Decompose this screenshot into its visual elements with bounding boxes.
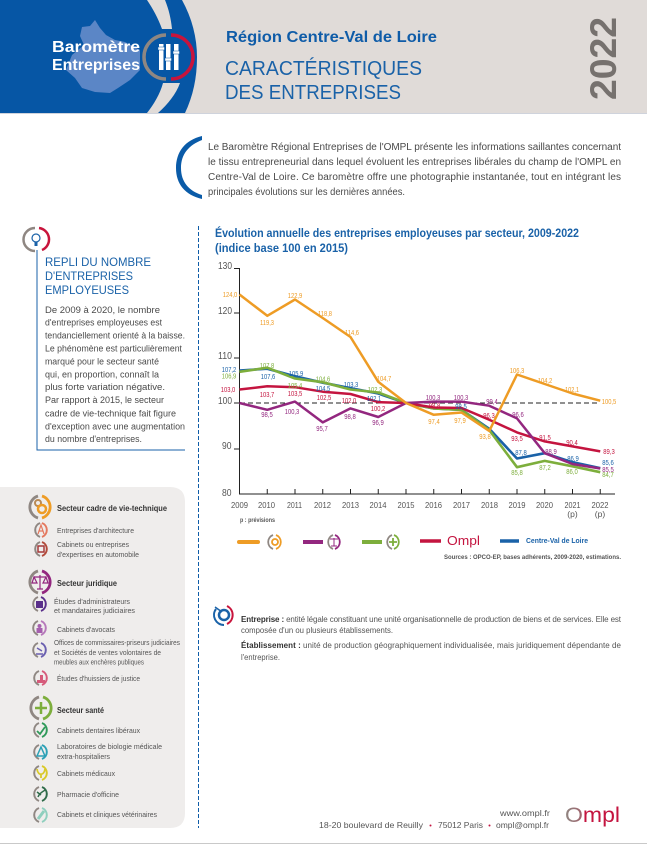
data labels: OMPL <box>221 387 615 456</box>
intro text: Le Baromètre Régional Entreprises de l'OMPL présente les informations saillantes concernant <box>208 142 621 153</box>
data labels: Centre-Val de Loire: 107,6 <box>261 374 275 381</box>
data labels: juridique: 99,4 <box>486 399 498 406</box>
heading: D'ENTREPRISES <box>45 269 133 283</box>
intro text: Centre-Val de Loire. Ce baromètre offre une photographie instantanée, tout en intégrant les <box>208 172 621 183</box>
panel: sectors <box>0 487 185 828</box>
legend <box>239 534 588 549</box>
data labels: OMPL: 90,4 <box>566 440 578 447</box>
icon: laboratoires <box>34 745 47 759</box>
x axis labels <box>231 500 609 519</box>
body text: du nombre d'entreprises. <box>45 434 142 445</box>
y axis labels: 130 <box>218 261 232 272</box>
body text: De 2009 à 2020, le nombre <box>45 305 160 316</box>
footer rule <box>0 843 647 844</box>
label: d'expertises en automobile <box>57 550 139 559</box>
data labels: Centre-Val de Loire: 104,5 <box>316 386 330 393</box>
body text: d'exception avec une augmentation <box>45 422 185 432</box>
data labels: OMPL: 98,8 <box>429 403 440 410</box>
label: Offices de commissaires-priseurs judiciaires <box>54 638 180 647</box>
year: 2022 <box>583 17 624 100</box>
label: et mandataires judiciaires <box>54 606 135 615</box>
label: meubles aux enchères publiques <box>54 658 144 666</box>
legend: juridique <box>303 535 340 549</box>
data labels: santé: 102,3 <box>368 387 382 394</box>
data labels: juridique: 85,5 <box>602 467 614 474</box>
body text: marqué pour le secteur santé <box>45 356 159 368</box>
icon: architecture <box>35 523 47 537</box>
label <box>54 597 135 615</box>
y axis labels: 90 <box>222 441 232 452</box>
data labels: cadre de vie: 119,3 <box>260 320 274 327</box>
data labels: juridique: 100,3 <box>285 409 299 416</box>
heading: EMPLOYEUSES <box>45 283 129 297</box>
page title: CARACTÉRISTIQUES <box>225 57 422 80</box>
series lines <box>240 294 600 472</box>
label: Cabinets médicaux <box>57 769 115 778</box>
icon: definitions <box>214 606 233 625</box>
footer contact: ompl@ompl.fr <box>496 820 549 830</box>
divider <box>198 226 200 828</box>
x axis labels: 2021 <box>564 500 581 510</box>
footer contact: 18-20 boulevard de Reuilly <box>319 820 424 830</box>
label: Cabinets et cliniques vétérinaires <box>57 810 157 819</box>
axes <box>234 268 615 494</box>
label: Cabinets d'avocats <box>57 625 115 634</box>
data labels: santé: 105,4 <box>288 383 302 390</box>
body text: qui, en proportion, connaît la <box>45 370 160 380</box>
intro text: le tissu entrepreneurial dans lequel évoluent les entreprises libérales du champ de l'OMPL en <box>208 157 621 168</box>
x axis labels: 2010 <box>258 500 275 510</box>
icon: light bulb <box>24 228 49 251</box>
data labels: Centre-Val de Loire: 107,2 <box>222 367 236 374</box>
data labels: cadre de vie <box>223 292 616 441</box>
data labels: juridique: 100,3 <box>454 395 468 402</box>
label: Laboratoires de biologie médicale <box>57 742 162 751</box>
legend: Centre-Val de Loire <box>500 538 588 545</box>
x axis labels: 2012 <box>314 500 331 510</box>
data labels: Centre-Val de Loire: 98,5 <box>455 404 467 411</box>
icon: huissiers <box>34 671 47 685</box>
footer contact: 75012 Paris <box>438 820 483 830</box>
data labels: cadre de vie: 102,1 <box>565 387 579 394</box>
data labels: OMPL: 89,3 <box>603 449 615 456</box>
icon: dentaires <box>34 723 47 737</box>
definitions: l'entreprise. <box>241 653 280 662</box>
label: Pharmacie d'officine <box>57 790 119 799</box>
heading <box>45 255 151 297</box>
data labels: OMPL: 91,5 <box>539 435 551 442</box>
heading: santé: Secteur santé <box>57 706 104 715</box>
data labels: OMPL: 103,5 <box>288 391 302 398</box>
data labels: juridique: 96,6 <box>512 412 524 419</box>
data labels: juridique: 100,3 <box>426 395 440 402</box>
icon: cadre de vie <box>30 496 50 518</box>
body text: cadre de vie-technique fait figure <box>45 408 176 420</box>
footer contact: www.ompl.fr <box>499 808 550 818</box>
icon: automobile <box>35 542 47 556</box>
data labels: santé: 84,7 <box>602 472 614 479</box>
icon: commissaires-priseurs <box>33 643 46 657</box>
header band <box>0 0 647 114</box>
barometer title: Entreprises <box>52 57 140 74</box>
x axis labels: 2022 <box>592 500 609 510</box>
definitions: composée d'un ou plusieurs établissements. <box>241 626 393 635</box>
definitions: Établissement : unité de production géographiquement individualisée, mais juridiquement dépendante de <box>241 641 622 650</box>
data labels: santé: 104,6 <box>316 376 330 384</box>
label <box>54 638 180 666</box>
data labels: Centre-Val de Loire: 85,6 <box>602 460 614 467</box>
data labels: santé: 106,9 <box>222 374 236 380</box>
data labels: cadre de vie: 124,0 <box>223 292 237 299</box>
chart title: Évolution annuelle des entreprises employeuses par secteur, 2009-2022 <box>215 227 579 240</box>
legend: OMPL <box>420 534 480 548</box>
data labels: juridique: 96,9 <box>372 420 384 427</box>
body text: d'entreprises employeuses est <box>45 318 162 328</box>
label: Études d'huissiers de justice <box>57 674 140 683</box>
data labels: santé: 87,2 <box>539 465 551 472</box>
definitions: Entreprise : entité légale constituant une unité organisationnelle de production de biens et de services. Elle est <box>241 615 622 624</box>
body text <box>45 305 185 445</box>
data labels: Centre-Val de Loire: 105,9 <box>289 371 303 378</box>
y axis labels: 110 <box>218 351 232 362</box>
data labels: cadre de vie: 93,8 <box>479 434 491 441</box>
icon: vétérinaires <box>34 808 47 822</box>
x axis labels: 2014 <box>370 500 387 510</box>
label <box>57 540 139 559</box>
footer contact <box>319 808 550 830</box>
label: Cabinets dentaires libéraux <box>57 726 140 735</box>
data labels: Centre-Val de Loire <box>222 367 614 467</box>
x axis labels: 2011 <box>287 500 302 510</box>
chart title <box>215 227 579 255</box>
legend: santé <box>362 535 399 549</box>
data labels: juridique: 98,8 <box>344 414 356 421</box>
x axis labels: 2020 <box>536 500 553 510</box>
logo: Ompl: Ompl <box>565 804 620 827</box>
data labels: juridique: 95,7 <box>316 426 328 433</box>
line chart <box>218 261 616 519</box>
x axis labels: 2013 <box>342 500 359 510</box>
body text: tendanciellement orienté à la baisse. <box>45 330 185 342</box>
data labels: cadre de vie: 97,9 <box>454 418 466 425</box>
icon: administrateurs <box>33 597 46 611</box>
data labels: OMPL: 100,2 <box>371 406 385 413</box>
data labels: santé <box>222 363 614 479</box>
heading: cadre de vie-technique: Secteur cadre de vie-technique <box>57 504 167 513</box>
data labels: santé: 107,8 <box>260 363 274 370</box>
data labels: santé: 85,8 <box>511 470 523 477</box>
data labels: cadre de vie: 100,5 <box>602 399 616 406</box>
icon: avocats <box>33 621 46 635</box>
forecast note: p : prévisions <box>240 518 276 524</box>
data labels: OMPL: 96,3 <box>483 413 495 420</box>
data labels: cadre de vie: 114,6 <box>345 330 359 337</box>
y axis labels <box>218 261 232 499</box>
icon: barometer sliders <box>144 35 193 79</box>
legend: OMPL: Ompl <box>447 534 480 548</box>
legend: Centre-Val de Loire: Centre-Val de Loire <box>526 538 588 545</box>
x axis labels: 2018 <box>481 500 498 510</box>
label <box>57 742 162 761</box>
data labels: juridique: 88,9 <box>545 449 557 456</box>
icon: médicaux <box>34 766 47 780</box>
region name: Région Centre-Val de Loire <box>226 29 437 46</box>
region silhouette <box>66 20 140 93</box>
body text: Par rapport à 2015, le secteur <box>45 395 165 406</box>
label: Études d'administrateurs <box>54 597 130 606</box>
definitions <box>241 615 622 662</box>
data labels: cadre de vie: 97,4 <box>428 419 440 426</box>
sources: Sources : OPCO-EP, bases adhérents, 2009-2020, estimations. <box>444 555 621 561</box>
data labels: OMPL: 93,5 <box>511 436 523 443</box>
barometer title: Baromètre <box>52 39 140 56</box>
body text: plus forte variation négative. <box>45 382 165 393</box>
data labels: cadre de vie: 104,7 <box>377 376 391 383</box>
x axis labels: (p) <box>567 509 578 519</box>
y axis labels: 100 <box>218 396 232 407</box>
data labels: OMPL: 103,7 <box>260 392 274 399</box>
barometer title <box>52 39 140 74</box>
data labels: Centre-Val de Loire: 86,9 <box>567 456 579 463</box>
intro text: principales évolutions sur les dernières années. <box>208 187 405 198</box>
chart title: (indice base 100 en 2015) <box>215 243 348 255</box>
data labels: Centre-Val de Loire: 87,8 <box>515 450 527 457</box>
data labels: juridique <box>261 395 614 474</box>
heading: juridique: Secteur juridique <box>57 579 117 588</box>
label: Cabinets ou entreprises <box>57 540 129 549</box>
data labels: santé: 86,0 <box>566 469 578 476</box>
data labels: juridique: 98,5 <box>261 412 273 419</box>
page title: DES ENTREPRISES <box>225 82 401 104</box>
x axis labels: 2015 <box>398 500 415 510</box>
x axis labels: (p) <box>595 509 605 519</box>
x axis labels: 2017 <box>453 500 470 510</box>
data labels: OMPL: 102,5 <box>317 395 331 402</box>
heading: REPLI DU NOMBRE <box>45 255 151 269</box>
data labels: cadre de vie: 122,9 <box>288 293 302 300</box>
y axis labels: 80 <box>222 488 232 499</box>
x axis labels: 2009 <box>231 500 248 510</box>
icon: juridique <box>30 571 50 593</box>
data labels: cadre de vie: 118,8 <box>318 311 332 318</box>
icon: pharmacie <box>34 787 47 801</box>
data labels: OMPL: 103,0 <box>221 387 235 394</box>
label: extra-hospitaliers <box>57 752 110 761</box>
intro bracket <box>176 136 202 199</box>
y axis labels: 120 <box>218 306 232 317</box>
label: Entreprises d'architecture <box>57 526 134 535</box>
legend: cadre de vie <box>239 535 281 549</box>
data labels: Centre-Val de Loire: 103,3 <box>344 382 358 389</box>
data labels: cadre de vie: 106,3 <box>510 368 524 375</box>
icon: santé <box>31 697 51 719</box>
data labels: cadre de vie: 104,2 <box>538 378 552 385</box>
panel: key finding <box>24 228 185 450</box>
data labels: Centre-Val de Loire: 102,1 <box>367 396 381 403</box>
x axis labels: 2019 <box>508 500 526 510</box>
page title <box>225 57 422 104</box>
data labels: OMPL: 102,0 <box>342 398 356 405</box>
intro text <box>208 142 621 198</box>
x axis labels: 2016 <box>425 500 442 510</box>
label: et Sociétés de ventes volontaires de <box>54 648 161 657</box>
body text: Le phénomène est particulièrement <box>45 344 182 354</box>
